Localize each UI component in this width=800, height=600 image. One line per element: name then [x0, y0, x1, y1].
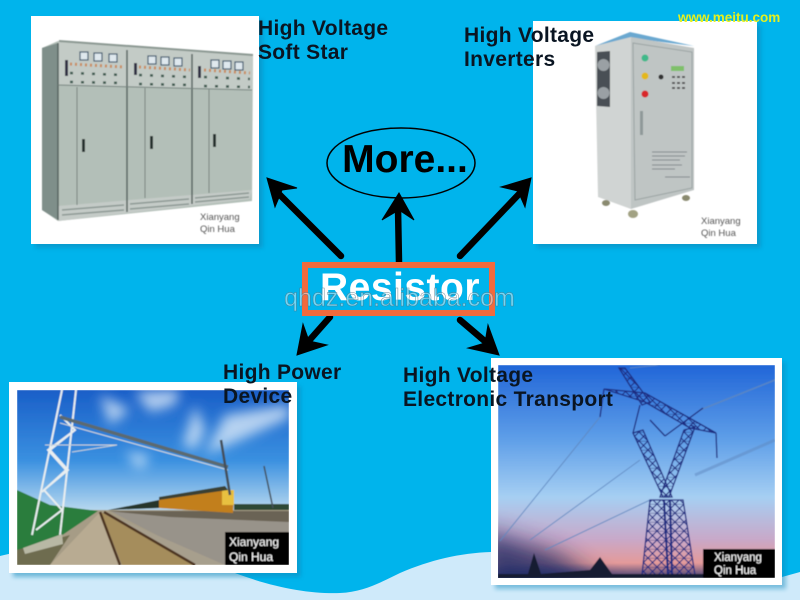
panel: transmission tower photo	[480, 358, 786, 600]
arrow: to electronic transport	[460, 320, 499, 355]
photo: silhouette of trees	[498, 553, 704, 578]
label: high voltage soft star: Soft Star	[258, 41, 348, 64]
watermark: meitu: www.meitu.com	[677, 10, 780, 25]
photo: ground and tracks	[50, 509, 289, 565]
resistor box: Resistor	[320, 266, 480, 309]
more ellipse	[327, 128, 475, 198]
image credit: Xianyang Qin Hua	[703, 549, 775, 578]
icon: switchgear cabinets	[42, 41, 253, 221]
image credit: Xianyang Qin Hua: Xianyang	[714, 552, 762, 564]
label: high voltage electronic transport: High Voltage	[403, 364, 533, 387]
image credit: Xianyang Qin Hua	[225, 532, 289, 565]
photo: sky	[17, 390, 289, 511]
panel: high voltage soft starter photo	[31, 16, 263, 248]
watermark: qhdz.en.alibaba.com	[284, 284, 515, 312]
label: high power device: Device	[223, 385, 293, 408]
arrow: to more	[382, 193, 414, 262]
image credit: Xianyang Qin Hua: Xianyang	[229, 535, 279, 549]
image credit: Xianyang Qin Hua	[701, 216, 741, 239]
arrow: to inverters	[460, 178, 531, 256]
photo: gantry tower	[32, 390, 230, 535]
label: high voltage inverters: High Voltage	[464, 24, 594, 47]
image credit: Xianyang Qin Hua: Qin Hua	[200, 224, 236, 235]
more ellipse: More...	[342, 138, 468, 181]
photo: train	[159, 488, 234, 513]
label: high voltage electronic transport: Electronic Transport	[403, 388, 613, 411]
image credit: Xianyang Qin Hua: Qin Hua	[701, 228, 737, 239]
arrow: to high power device	[297, 317, 330, 355]
panel: railway photo	[9, 382, 301, 577]
icon: inverter cabinet	[595, 32, 694, 218]
wave at bottom	[0, 549, 800, 600]
label: high power device: High Power	[223, 361, 342, 384]
image credit: Xianyang Qin Hua	[200, 212, 240, 235]
photo: pylon	[600, 368, 717, 575]
photo: power lines	[500, 365, 775, 550]
photo: dusk sky	[498, 365, 775, 578]
image credit: Xianyang Qin Hua: Xianyang	[701, 216, 741, 227]
label: high voltage inverters: Inverters	[464, 48, 555, 71]
image credit: Xianyang Qin Hua: Qin Hua	[229, 550, 273, 564]
arrow: to soft starter	[267, 178, 341, 256]
image credit: Xianyang Qin Hua: Qin Hua	[714, 565, 757, 577]
image credit: Xianyang Qin Hua: Xianyang	[200, 212, 240, 223]
panel: high voltage inverter photo	[533, 21, 761, 248]
label: high voltage soft star: High Voltage	[258, 17, 388, 40]
